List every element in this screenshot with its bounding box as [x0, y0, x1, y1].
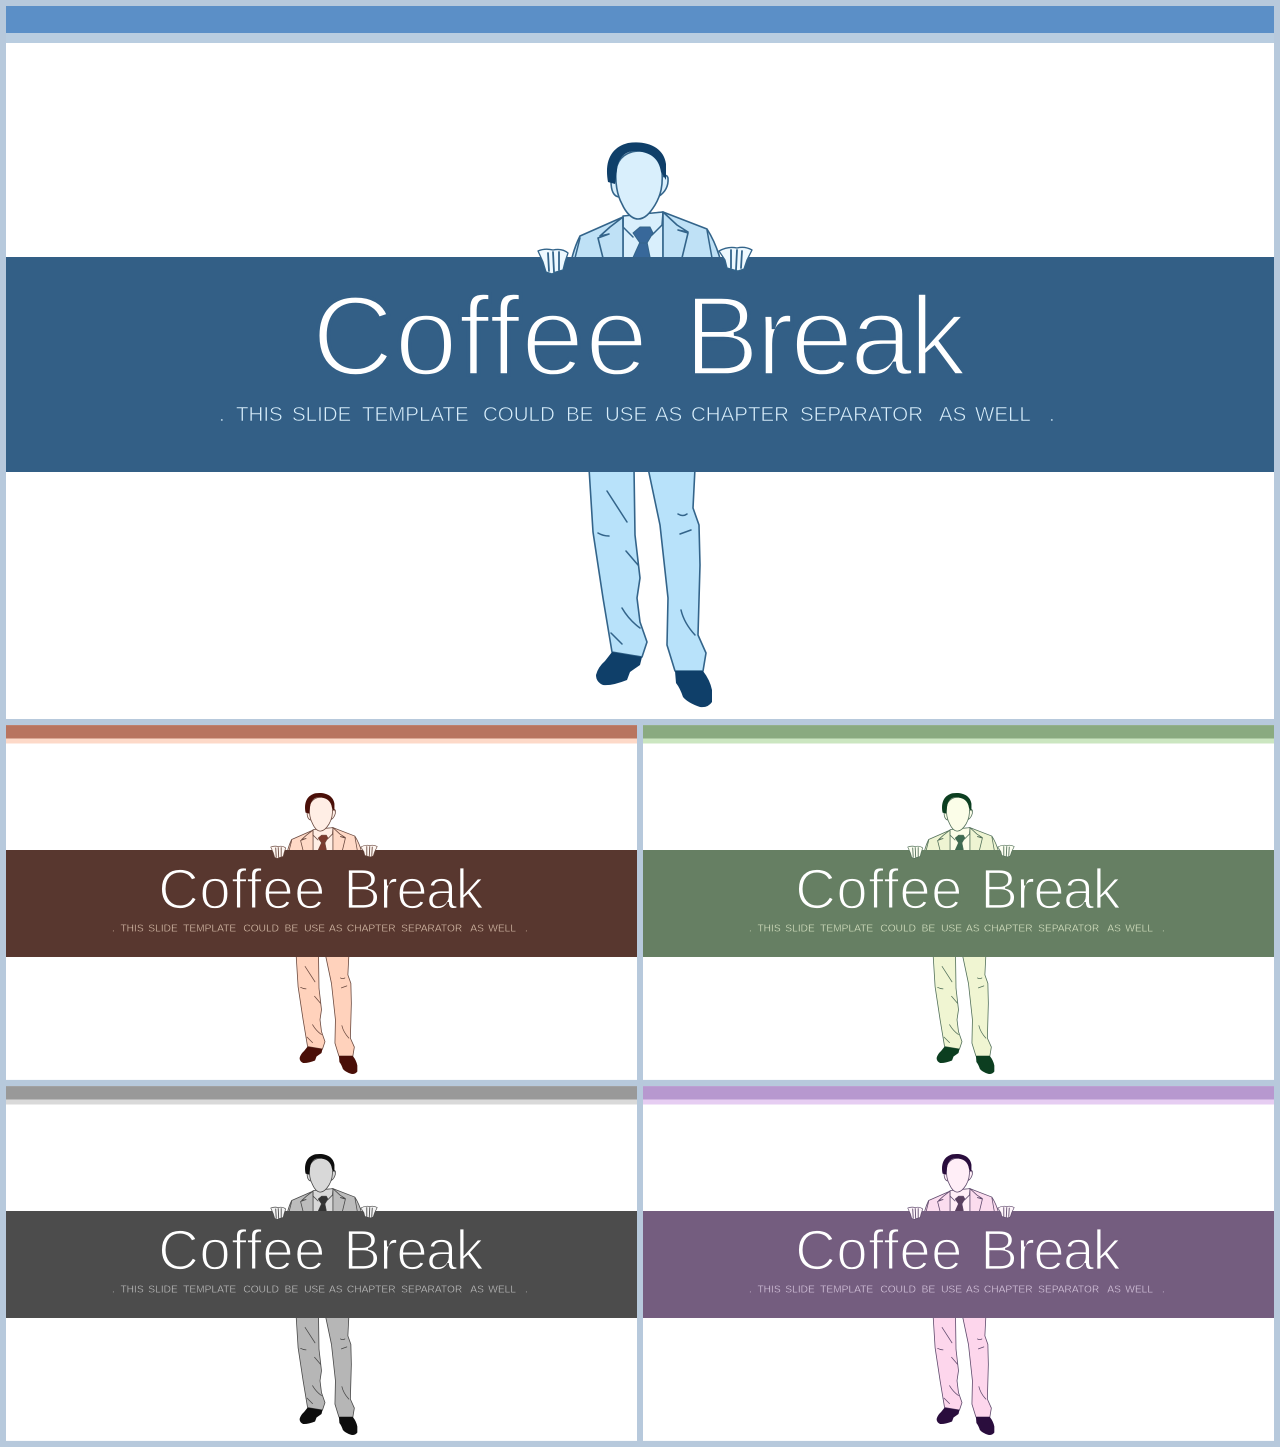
subtitle: TEMPLATE	[183, 924, 236, 935]
subtitle: THIS	[236, 403, 283, 426]
subtitle: USE	[304, 924, 325, 935]
subtitle: COULD	[243, 924, 279, 935]
title banner	[643, 850, 1274, 957]
subtitle: TEMPLATE	[183, 1285, 236, 1296]
subtitle: THIS	[120, 1285, 144, 1296]
illustration: man in suit	[924, 1154, 999, 1435]
title banner	[6, 1211, 637, 1318]
subtitle: CHAPTER	[347, 924, 396, 935]
illustration: man in suit	[571, 142, 721, 707]
panel: green slide	[643, 725, 1274, 1080]
subtitle: TEMPLATE	[362, 403, 469, 426]
illustration: man in suit	[287, 1154, 362, 1435]
subtitle: SEPARATOR	[1038, 1285, 1099, 1296]
subtitle: TEMPLATE	[820, 924, 873, 935]
subtitle: .	[112, 924, 115, 935]
subtitle: .	[112, 1285, 115, 1296]
title: Coffee	[795, 1219, 962, 1282]
subtitle: .	[219, 403, 225, 426]
subtitle: .	[1162, 924, 1165, 935]
subtitle: BE	[285, 924, 298, 935]
subtitle: AS	[1107, 1285, 1121, 1296]
panel: brown slide	[6, 725, 637, 1080]
subtitle: COULD	[483, 403, 555, 426]
subtitle: AS	[939, 403, 966, 426]
title: Break	[343, 858, 485, 921]
subtitle: WELL	[488, 924, 516, 935]
subtitle: SLIDE	[785, 924, 815, 935]
title: Coffee	[795, 858, 962, 921]
subtitle: TEMPLATE	[820, 1285, 873, 1296]
title banner	[6, 257, 1274, 472]
subtitle: AS	[470, 1285, 484, 1296]
subtitle: SLIDE	[148, 924, 178, 935]
subtitle: THIS	[757, 924, 781, 935]
subtitle: .	[1049, 403, 1055, 426]
title: Coffee	[158, 858, 325, 921]
title: Break	[980, 858, 1122, 921]
subtitle: BE	[566, 403, 593, 426]
subtitle: WELL	[488, 1285, 516, 1296]
subtitle: CHAPTER	[347, 1285, 396, 1296]
subtitle: USE	[941, 1285, 962, 1296]
title: Break	[684, 273, 966, 399]
panel: purple slide	[643, 1086, 1274, 1441]
subtitle: USE	[304, 1285, 325, 1296]
illustration: man in suit	[924, 793, 999, 1074]
title: Break	[343, 1219, 485, 1282]
subtitle: USE	[605, 403, 647, 426]
icon: hands gripping banner	[908, 845, 1014, 858]
title: Break	[980, 1219, 1122, 1282]
subtitle: AS	[329, 1285, 343, 1296]
header band	[6, 725, 637, 744]
subtitle: .	[749, 1285, 752, 1296]
subtitle: WELL	[1125, 924, 1153, 935]
panel: gray slide	[6, 1086, 637, 1441]
subtitle: WELL	[975, 403, 1030, 426]
title: Coffee	[158, 1219, 325, 1282]
subtitle: SLIDE	[292, 403, 351, 426]
subtitle: SLIDE	[785, 1285, 815, 1296]
subtitle: THIS	[757, 1285, 781, 1296]
subtitle: USE	[941, 924, 962, 935]
subtitle: .	[525, 1285, 528, 1296]
subtitle: BE	[922, 1285, 935, 1296]
subtitle: .	[1162, 1285, 1165, 1296]
subtitle: SEPARATOR	[800, 403, 923, 426]
subtitle: BE	[285, 1285, 298, 1296]
title banner	[643, 1211, 1274, 1318]
header band	[6, 1086, 637, 1105]
subtitle: SEPARATOR	[1038, 924, 1099, 935]
icon: hands gripping banner	[271, 845, 377, 858]
subtitle: SEPARATOR	[401, 1285, 462, 1296]
subtitle: SLIDE	[148, 1285, 178, 1296]
subtitle: THIS	[120, 924, 144, 935]
subtitle: AS	[470, 924, 484, 935]
title: Coffee	[312, 273, 648, 399]
illustration: man in suit	[287, 793, 362, 1074]
subtitle: COULD	[880, 924, 916, 935]
subtitle: CHAPTER	[984, 1285, 1033, 1296]
subtitle: BE	[922, 924, 935, 935]
subtitle: AS	[655, 403, 682, 426]
panel: large blue slide	[6, 6, 1274, 719]
header band	[6, 6, 1274, 43]
icon: hands gripping banner	[271, 1206, 377, 1219]
subtitle: AS	[966, 1285, 980, 1296]
header band	[643, 1086, 1274, 1105]
subtitle: .	[525, 924, 528, 935]
icon: hands gripping banner	[538, 247, 752, 274]
header band	[643, 725, 1274, 744]
subtitle: COULD	[243, 1285, 279, 1296]
title banner	[6, 850, 637, 957]
icon: hands gripping banner	[908, 1206, 1014, 1219]
subtitle: CHAPTER	[691, 403, 789, 426]
subtitle: AS	[966, 924, 980, 935]
subtitle: AS	[1107, 924, 1121, 935]
subtitle: WELL	[1125, 1285, 1153, 1296]
subtitle: CHAPTER	[984, 924, 1033, 935]
subtitle: .	[749, 924, 752, 935]
subtitle: AS	[329, 924, 343, 935]
subtitle: COULD	[880, 1285, 916, 1296]
subtitle: SEPARATOR	[401, 924, 462, 935]
